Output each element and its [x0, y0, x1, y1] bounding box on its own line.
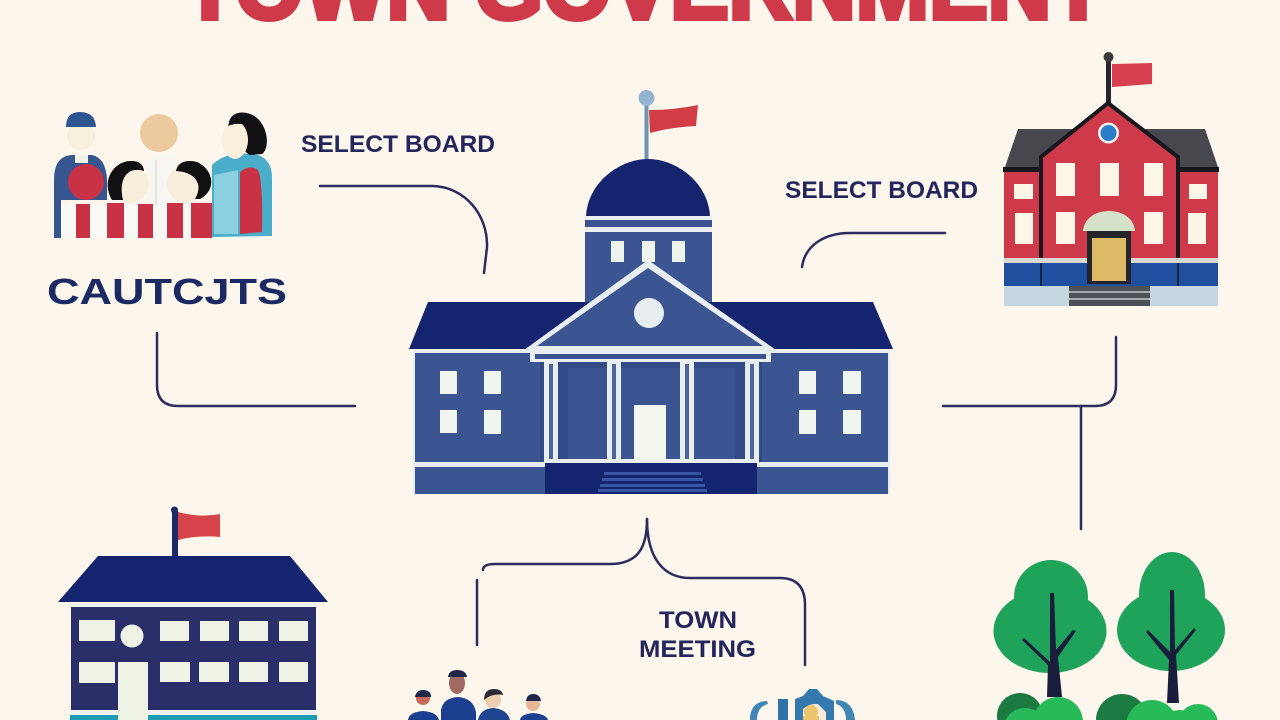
label: garbled residents caption: CAUTCJTS [47, 271, 287, 312]
label: town meeting: MEETING [639, 636, 756, 663]
white backing [60, 204, 210, 238]
door [118, 662, 148, 720]
roof [58, 556, 328, 602]
round window [1098, 122, 1119, 144]
left man [54, 112, 107, 238]
portico [540, 362, 762, 463]
icon: town meeting people [408, 670, 548, 720]
icon: red schoolhouse [1003, 52, 1219, 306]
person 1 [408, 690, 439, 720]
right child [167, 161, 211, 238]
wing roofs [409, 302, 893, 349]
flag on town hall [638, 90, 698, 160]
central gable [1041, 103, 1178, 285]
left child [107, 161, 149, 238]
windows [79, 620, 308, 683]
label: select board right: SELECT BOARD [785, 177, 978, 204]
icon: trees [994, 552, 1225, 720]
wall [70, 603, 317, 607]
connector lines [157, 186, 1116, 665]
flag [171, 506, 220, 557]
flag [1104, 52, 1152, 106]
tower [585, 216, 712, 302]
wing walls [413, 350, 890, 494]
wing windows [440, 371, 861, 434]
icon: blue civic emblem [750, 689, 855, 720]
bushes [997, 693, 1218, 720]
label: select board left: SELECT BOARD [301, 131, 495, 158]
door [634, 405, 666, 460]
icon: town hall [409, 90, 893, 494]
pediment [524, 260, 776, 350]
foundation [70, 710, 317, 720]
icon: navy school [58, 506, 328, 720]
grey roof [1004, 129, 1219, 170]
entablature [530, 350, 771, 362]
middle man [138, 114, 178, 238]
label: town meeting [639, 607, 756, 663]
side walls [1004, 170, 1218, 260]
windows [1014, 163, 1207, 244]
right woman [191, 112, 272, 238]
label: town meeting: TOWN [659, 607, 737, 634]
dome [586, 159, 710, 216]
person 4 [520, 694, 548, 720]
base and steps [545, 463, 757, 494]
columns [544, 362, 759, 462]
person 2 [441, 670, 476, 720]
icon: family group [54, 112, 272, 238]
foundation [1004, 258, 1218, 306]
left tree [994, 560, 1106, 697]
right tree [1117, 552, 1225, 703]
person 3 [478, 689, 510, 720]
door and awning [1083, 211, 1135, 284]
